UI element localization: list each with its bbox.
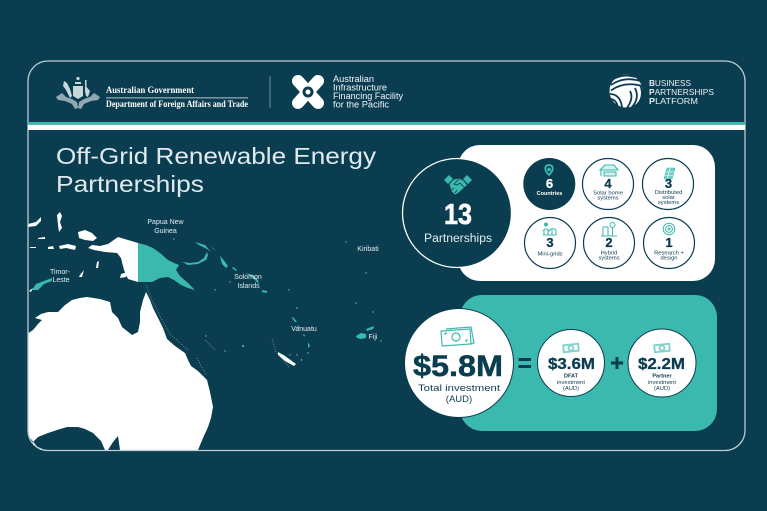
circle: total investment: Total investment bbox=[418, 383, 500, 394]
icon: coat of arms bbox=[56, 77, 100, 109]
circle: 13 partnerships bbox=[402, 158, 512, 268]
map labels: Vanuatu bbox=[291, 326, 317, 333]
circle: 4 solar home systems: systems bbox=[597, 196, 619, 202]
circle: 13 partnerships: 13 bbox=[444, 199, 472, 231]
header: Business Partnerships Platform logo: PARTNERSHIPS bbox=[649, 87, 714, 97]
title bbox=[56, 143, 377, 197]
circle: 1 research + design: design bbox=[660, 256, 678, 262]
header: Australian Government logo: Australian Government bbox=[106, 85, 194, 95]
header: Business Partnerships Platform logo bbox=[610, 74, 714, 108]
icon: BPP round mark bbox=[610, 74, 642, 108]
header: AIFFP logo: for the Pacific bbox=[333, 100, 390, 110]
panel: investment bbox=[404, 295, 717, 431]
circle: 3 distributed solar systems bbox=[642, 158, 694, 210]
map labels bbox=[50, 219, 379, 341]
circle: 3 distributed solar systems: systems bbox=[658, 200, 679, 206]
map labels: Guinea bbox=[154, 228, 177, 235]
icon: solar panel bbox=[664, 168, 675, 179]
map labels: Papua New bbox=[147, 219, 185, 226]
Solomon Islands, Vanuatu and Fiji bbox=[232, 267, 374, 348]
circle: partner investment: Partner bbox=[652, 374, 672, 380]
page frame bbox=[28, 61, 745, 450]
header: AIFFP logo bbox=[298, 74, 403, 110]
circle: total investment: $5.8M bbox=[413, 350, 503, 383]
header: AIFFP logo: Australian bbox=[333, 74, 374, 84]
Papua (Indonesia) bbox=[88, 237, 138, 282]
circle: 13 partnerships: Partnerships bbox=[424, 233, 492, 245]
circle: 1 research + design: Research + bbox=[654, 250, 685, 256]
map labels: Leste bbox=[52, 277, 70, 284]
header: Business Partnerships Platform logo: BUSINESS bbox=[649, 78, 691, 88]
circle: DFAT investment bbox=[538, 330, 604, 396]
circle: 4 solar home systems: Solar home bbox=[593, 190, 623, 196]
circle: 4 solar home systems bbox=[582, 158, 634, 210]
icon: banknotes bbox=[441, 327, 474, 346]
header: Australian Government logo: Department of Foreign Affairs and Trade bbox=[106, 99, 248, 109]
title: Off-Grid Renewable Energy bbox=[56, 143, 377, 169]
circle: DFAT investment: (AUD) bbox=[563, 386, 579, 392]
header: Business Partnerships Platform logo: PLATFORM bbox=[649, 96, 698, 106]
icon: map pin bbox=[545, 165, 553, 175]
icon: mini-grid bbox=[543, 223, 556, 235]
icon: hybrid system bbox=[601, 222, 617, 236]
circle: 1 research + design: 1 bbox=[665, 235, 673, 250]
circle: 4 solar home systems: 4 bbox=[604, 176, 612, 191]
circle: 3 distributed solar systems: solar bbox=[662, 195, 675, 201]
plus sign bbox=[611, 357, 623, 369]
circle: 6 countries: 6 bbox=[546, 176, 553, 191]
header: AIFFP logo: Financing Facility bbox=[333, 91, 403, 101]
circle: partner investment: $2.2M bbox=[638, 356, 685, 373]
equals sign bbox=[518, 358, 531, 368]
map labels: Kiribati bbox=[357, 246, 379, 253]
title: Partnerships bbox=[56, 171, 204, 197]
circle: 6 countries: Countries bbox=[537, 191, 562, 197]
circle: 6 countries bbox=[523, 158, 575, 210]
New Caledonia bbox=[278, 352, 302, 366]
Bird's Head and Indonesian islands bbox=[28, 212, 128, 292]
circle: 3 mini-grids: 3 bbox=[546, 235, 554, 250]
Papua New Guinea bbox=[32, 238, 228, 290]
icon: research target bbox=[663, 223, 675, 235]
Australia landmass bbox=[28, 292, 213, 450]
circle: 2 hybrid systems bbox=[584, 218, 634, 268]
icon: banknote bbox=[563, 344, 579, 352]
circle: 3 distributed solar systems: Distributed bbox=[655, 190, 682, 196]
map labels: Solomon bbox=[234, 274, 262, 281]
scattered islets bbox=[205, 241, 382, 356]
circle: 3 mini-grids: Mini-grids bbox=[537, 252, 563, 258]
circle: partner investment: (AUD) bbox=[654, 386, 670, 392]
panel: partnerships breakdown bbox=[402, 145, 715, 281]
header divider band bbox=[28, 122, 745, 130]
map labels: Timor- bbox=[50, 269, 71, 276]
circle: 2 hybrid systems: 2 bbox=[605, 235, 613, 250]
icon: AIFFP cross mark bbox=[298, 81, 318, 103]
circle: 3 mini-grids bbox=[524, 218, 576, 268]
circle: 2 hybrid systems: systems bbox=[598, 256, 620, 262]
circle: partner investment: investment bbox=[648, 380, 676, 386]
divider between logos bbox=[270, 76, 271, 108]
circle: DFAT investment: DFAT bbox=[564, 374, 579, 380]
circle: 1 research + design bbox=[644, 218, 694, 268]
map: Australia and Pacific bbox=[28, 212, 382, 450]
circle: total investment: (AUD) bbox=[446, 394, 472, 405]
icon: solar house bbox=[600, 165, 618, 176]
circle: 3 distributed solar systems: 3 bbox=[665, 176, 672, 191]
reefs bbox=[146, 285, 290, 375]
icon: banknote bbox=[654, 344, 670, 352]
map labels: Fiji bbox=[369, 334, 378, 341]
map labels: Islands bbox=[237, 283, 260, 290]
circle: total investment bbox=[404, 308, 514, 418]
icon: handshake bbox=[444, 175, 472, 194]
circle: 2 hybrid systems: Hybrid bbox=[601, 250, 617, 256]
circle: partner investment bbox=[628, 329, 696, 397]
header: AIFFP logo: Infrastructure bbox=[333, 82, 387, 92]
header: Australian Government logo bbox=[56, 77, 248, 109]
circle: DFAT investment: $3.6M bbox=[548, 356, 595, 373]
circle: DFAT investment: investment bbox=[557, 380, 585, 386]
